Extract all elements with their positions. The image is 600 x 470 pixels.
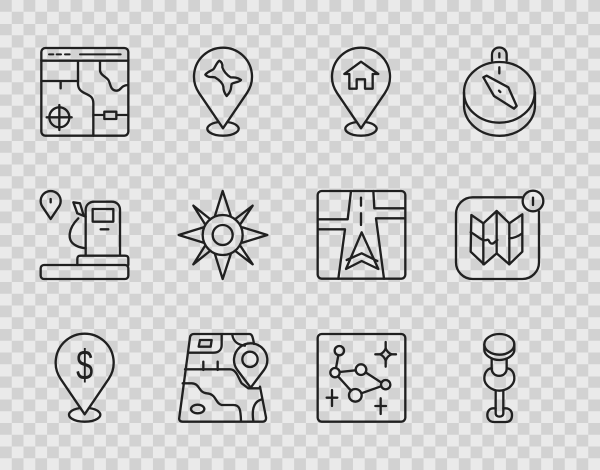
icon: compass	[464, 47, 535, 136]
icon: location pin with house	[332, 48, 390, 136]
icon: location pin with world region	[194, 48, 252, 136]
icon: location pin with dollar sign: $	[76, 340, 93, 389]
icon: star constellation chart	[318, 334, 405, 422]
icon: road map with navigation arrow	[318, 191, 405, 279]
icon: wind rose	[179, 191, 267, 279]
icon: browser window with city map	[41, 48, 128, 136]
icon: terrain map with location pin	[179, 334, 267, 422]
icon: location pin with dollar sign	[56, 334, 114, 422]
icon: push pin	[484, 334, 514, 422]
icon: petrol pump with location marker	[41, 191, 128, 279]
icon: folded map app with notification badge	[456, 191, 543, 279]
